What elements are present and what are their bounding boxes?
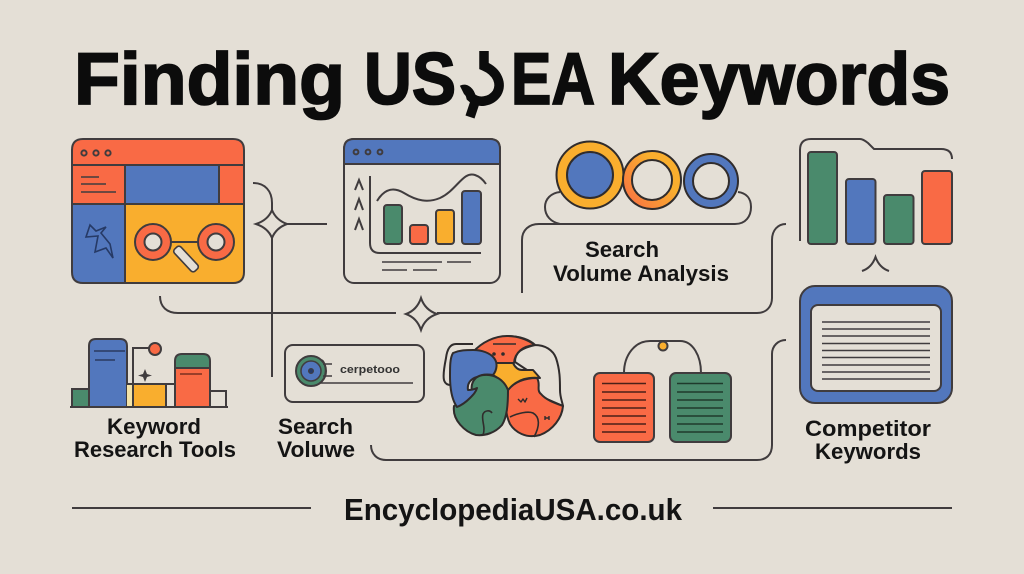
arrow: up to bar chart: [862, 257, 889, 271]
heading: search volume analysis: Search: [585, 237, 659, 262]
panel: search box: [285, 345, 424, 402]
title: Keywords: [608, 39, 950, 120]
panel: keyword tool window: [72, 139, 244, 283]
heading: keyword research tools: [74, 414, 236, 462]
title: [74, 39, 950, 120]
title: US: [364, 39, 456, 120]
icon: competitor document tablet: [800, 286, 952, 403]
connector lines: [72, 183, 952, 508]
icon: star connector left: [256, 210, 287, 238]
heading: search volume analysis: [553, 237, 729, 286]
heading: search volume: Search: [278, 414, 353, 439]
title: Finding: [74, 39, 345, 120]
heading: keyword research tools: Research Tools: [74, 437, 236, 462]
heading: search volume analysis: Volume Analysis: [553, 261, 729, 286]
heading: competitor keywords: Competitor: [805, 416, 931, 441]
heading: keyword research tools: Keyword: [107, 414, 201, 439]
heading: search volume: Voluwe: [277, 437, 355, 462]
icon: folder bar chart: [800, 139, 952, 244]
icon: keyword research tools buildings: [70, 339, 228, 407]
heading: competitor keywords: [805, 416, 931, 464]
title: EA: [511, 39, 595, 120]
icon: paired document cards: [594, 341, 731, 442]
panel: analytics window: [344, 139, 500, 283]
heading: search volume: [277, 414, 355, 462]
icon: star connector center: [406, 298, 437, 330]
footer: source: EncyclopediaUSA.co.uk: [344, 492, 683, 527]
icon: search volume rings: [556, 142, 738, 209]
icon: puzzle cluster: [444, 336, 563, 437]
heading: competitor keywords: Keywords: [815, 439, 921, 464]
panel: search box: cerpetooo: [340, 364, 400, 376]
